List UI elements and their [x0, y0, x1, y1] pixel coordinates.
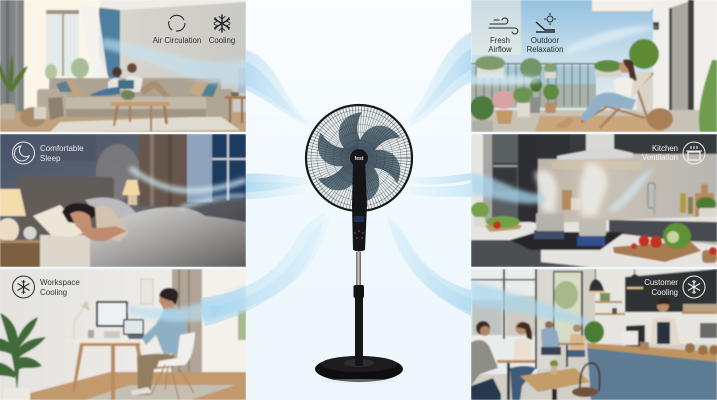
ribbon: middle right	[411, 173, 471, 197]
couple	[90, 63, 170, 97]
fan control neck	[352, 160, 367, 252]
panel: workspace cooling	[0, 269, 246, 400]
panel: cafe customer cooling	[471, 269, 717, 400]
potted plant	[0, 312, 46, 388]
icon: cooking pot	[683, 142, 705, 164]
label: air circulation: Air Circulation	[153, 36, 201, 45]
coffee table	[111, 102, 170, 131]
seated customers	[471, 321, 585, 400]
barista	[650, 298, 680, 345]
airflow inside living room	[102, 38, 246, 86]
icon: moon	[12, 142, 34, 164]
icon and label: fresh airflow: Airflow	[488, 45, 512, 54]
icon and label: fresh airflow: Fresh	[490, 36, 510, 45]
side table	[225, 68, 246, 123]
airflow inside workspace	[128, 285, 246, 322]
icon and label: fresh airflow	[488, 18, 518, 54]
label: comfortable sleep: Sleep	[40, 154, 61, 163]
stand fan	[305, 104, 413, 383]
fan pole	[354, 252, 364, 366]
fan grille	[306, 105, 412, 211]
desk	[72, 339, 142, 400]
board and vegetables	[471, 202, 717, 263]
label: customer cooling: Cooling	[652, 288, 678, 297]
panel: kitchen ventilation	[471, 134, 717, 267]
label: cooling: Cooling	[209, 36, 235, 45]
steam	[534, 163, 607, 216]
lounger and woman	[556, 59, 653, 128]
counter	[587, 342, 717, 400]
sleeping woman	[62, 203, 129, 242]
label: kitchen ventilation: Ventilation	[642, 153, 678, 162]
ribbon: lower left	[200, 212, 330, 326]
backsplash items	[562, 183, 717, 223]
ribbon: upper left	[246, 50, 314, 128]
panel: living room air circulation and cooling	[0, 0, 246, 132]
fan blades	[309, 112, 409, 204]
pots	[536, 213, 606, 236]
label: workspace cooling: Cooling	[40, 288, 67, 297]
monitor	[88, 301, 152, 339]
lamp	[74, 301, 90, 340]
icon: workspace snowflake	[12, 276, 34, 298]
ribbon: lower right	[386, 214, 471, 316]
hob	[510, 230, 625, 250]
panel: balcony fresh airflow and outdoor relaxation	[470, 0, 717, 132]
icon and label: outdoor relaxation: Relaxation	[527, 45, 563, 54]
label: comfortable sleep: Comfortable	[40, 144, 84, 153]
airflow inside cafe	[471, 282, 590, 325]
pendant lamps	[589, 269, 644, 293]
counter and cabinets	[471, 216, 717, 267]
fan hub	[350, 149, 368, 167]
foreground table and chair	[520, 360, 600, 400]
icon and label: outdoor relaxation	[527, 13, 563, 54]
label: customer cooling: Customer	[644, 278, 678, 287]
fan head	[305, 104, 413, 212]
airflow inside balcony	[471, 26, 660, 85]
label: kitchen ventilation: Kitchen	[652, 144, 678, 153]
plant	[584, 321, 604, 343]
chair	[151, 332, 195, 400]
railing	[471, 63, 601, 106]
airflow inside bedroom	[130, 168, 246, 208]
label: cooling	[209, 15, 235, 45]
panel: bedroom comfortable sleep	[0, 134, 246, 267]
icon: customer snowflake	[683, 276, 705, 298]
fan brand: fest	[355, 156, 364, 162]
label: workspace cooling: Workspace	[40, 278, 80, 287]
label: air circulation	[153, 15, 201, 45]
plant and basket	[0, 54, 46, 127]
ribbon: middle left	[246, 173, 306, 199]
plants	[470, 39, 659, 132]
airflow inside kitchen	[471, 168, 655, 212]
fan base	[315, 356, 403, 383]
icon and label: outdoor relaxation: Outdoor	[531, 36, 559, 45]
ribbon: upper right	[404, 32, 471, 128]
airflow ribbons	[200, 32, 471, 326]
man	[131, 288, 187, 395]
